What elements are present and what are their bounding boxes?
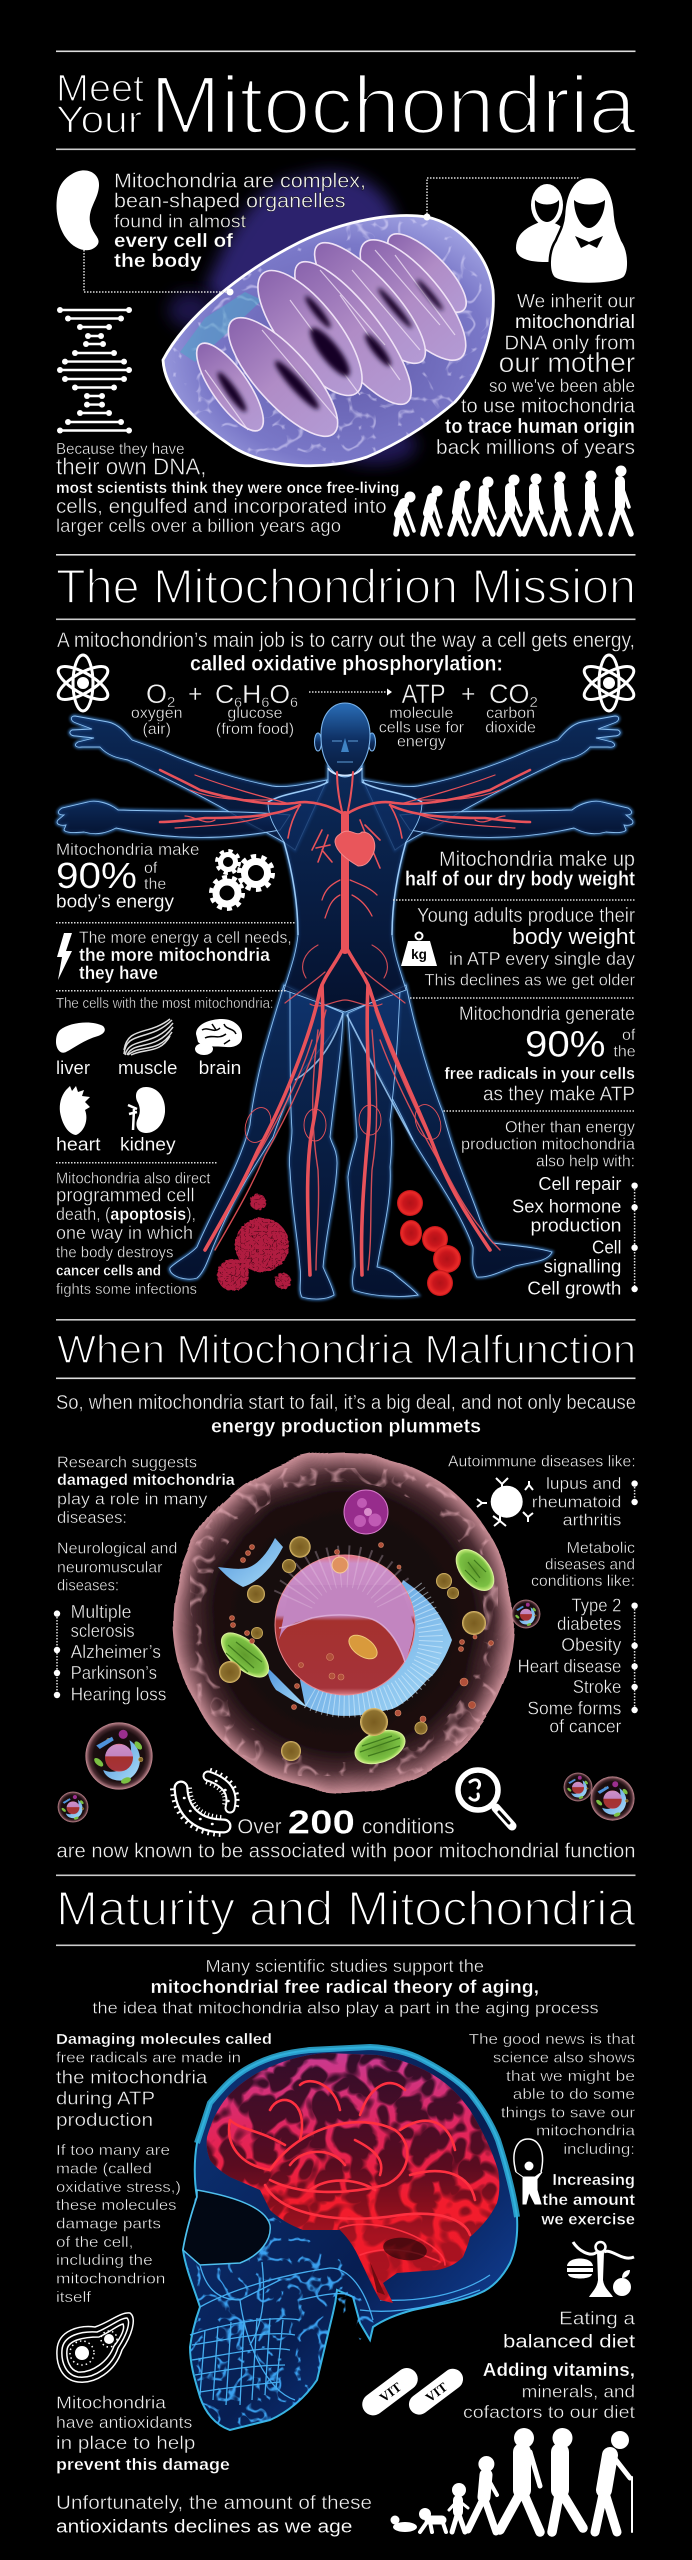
- intro text: Many scientific studies support the: [206, 1956, 484, 1976]
- text: apoptosis: the body destroys: [56, 1245, 174, 1262]
- formula labels: [131, 705, 536, 751]
- text: more energy more mitochondria: they have: [79, 963, 158, 983]
- formula labels: energy: [397, 734, 446, 751]
- text: apoptosis: one way in which: [56, 1223, 193, 1243]
- list: other functions: Cell: [592, 1237, 621, 1257]
- icon: bacteria: [181, 1776, 231, 1826]
- formula labels: dioxide: [485, 720, 536, 737]
- stat: 90 percent of energy: the: [144, 876, 166, 893]
- text: their own DNA: cells, engulfed and incorporated into: [56, 496, 387, 518]
- formula: CO: [489, 679, 530, 709]
- icon: liver: [56, 1023, 105, 1053]
- list: metabolic diseases: Some forms: [527, 1699, 621, 1719]
- list: metabolic diseases: [518, 1595, 638, 1736]
- list: other functions: production: [530, 1216, 622, 1236]
- text: apoptosis: cancer cells and: [56, 1263, 161, 1280]
- stat: 90 percent of energy: Mitochondria make: [56, 841, 200, 859]
- text: inherit from mother: to use mitochondria: [461, 396, 636, 418]
- formula: ATP: [402, 679, 446, 709]
- text: neurological diseases: Neurological and: [57, 1541, 177, 1558]
- text: other functions: [461, 1118, 636, 1171]
- list: metabolic diseases: Stroke: [573, 1677, 621, 1697]
- heart: [335, 831, 375, 866]
- formula labels: (air): [142, 721, 171, 738]
- text: bean-shaped organelles: every cell of: [114, 230, 234, 252]
- text: oxidative stress: damage parts: [56, 2216, 161, 2233]
- connector: bean to mitochondrion: [84, 250, 234, 296]
- text: neurological diseases: diseases:: [57, 1578, 119, 1595]
- text: bean-shaped organelles: the body: [114, 250, 202, 272]
- formula: 6: [234, 694, 242, 710]
- icon: jump rope: [514, 2139, 543, 2204]
- text: inherit from mother: our mother: [499, 347, 635, 378]
- text: autoimmune diseases: arthritis: [563, 1510, 621, 1529]
- text: free radicals: during ATP: [56, 2089, 155, 2109]
- text: inherit from mother: DNA only from: [504, 332, 635, 354]
- formula labels: carbon: [486, 705, 535, 722]
- organ labels row 1: liver: [56, 1058, 90, 1078]
- icon: mitochondrion outline: [57, 2313, 133, 2382]
- icon: vitamin pills: VIT: [377, 2379, 404, 2405]
- text: good news: able to do some: [513, 2086, 635, 2103]
- text: good news: The good news is that: [469, 2031, 636, 2048]
- text: damaged mitochondria: [57, 1454, 235, 1527]
- orange mitochondrion: [345, 1630, 381, 1664]
- text: body weight in ATP: [417, 905, 636, 990]
- text: balanced diet: Eating a: [559, 2308, 636, 2329]
- stat: 90 percent free radicals: the: [613, 1044, 636, 1061]
- organ labels row 2: kidney: [120, 1135, 176, 1155]
- formula: [146, 679, 538, 711]
- text: autoimmune diseases: Autoimmune diseases like:: [448, 1453, 636, 1470]
- text: over 200 conditions: Over: [237, 1816, 282, 1839]
- text: more energy more mitochondria: The more energy a cell needs,: [79, 928, 292, 947]
- text: free radicals: [56, 2031, 272, 2130]
- icon: magnifying glass: [458, 1770, 512, 1826]
- text: their own DNA: Because they have: [56, 441, 184, 458]
- cell illustration: [174, 1452, 514, 1792]
- text: free radicals: production: [56, 2110, 153, 2130]
- text: vitamins: [463, 2360, 635, 2422]
- icon: heart organ: [60, 1086, 90, 1135]
- small vesicle dots: [230, 1542, 494, 1722]
- intro text: the idea that mitochondria also play a part in the aging process: [92, 1998, 599, 2018]
- heading: Maturity and Mitochondria: [56, 1883, 636, 1936]
- icon: brain: [195, 1019, 242, 1055]
- text: apoptosis: fights some infections: [56, 1281, 197, 1298]
- text: oxidative stress: [56, 2142, 181, 2306]
- stat: 90 percent free radicals: Mitochondria generate: [459, 1004, 635, 1025]
- panel: the mitochondrion mission: [54, 554, 638, 1299]
- text: free radicals: free radicals are made in: [56, 2049, 241, 2066]
- text: antioxidants: in place to help: [56, 2433, 195, 2453]
- text: bean-shaped organelles: found in almost: [114, 210, 246, 231]
- text: good news: that we might be: [506, 2068, 635, 2085]
- stat: 90 percent free radicals: [444, 1004, 636, 1106]
- text: antioxidants: Mitochondria: [56, 2393, 166, 2413]
- icon: bean: [57, 170, 99, 250]
- endoplasmic reticulum: [218, 1538, 452, 1716]
- text: neurological diseases: [57, 1541, 177, 1595]
- text: oxidative stress: these molecules: [56, 2197, 176, 2214]
- text: autoimmune diseases: lupus and: [546, 1474, 621, 1493]
- list: neurological diseases: Hearing loss: [71, 1685, 166, 1705]
- formula: +: [188, 680, 203, 708]
- title: Your: [56, 100, 142, 142]
- list: metabolic diseases: Heart disease: [518, 1656, 621, 1676]
- text: free radicals: the mitochondria: [56, 2068, 208, 2088]
- icon: atom right: [580, 655, 638, 711]
- text: neurological diseases: neuromuscular: [57, 1560, 162, 1576]
- text: autoimmune diseases: [448, 1453, 638, 1529]
- text: good news: science also shows: [493, 2049, 635, 2066]
- text: inherit from mother: [436, 292, 636, 459]
- icon: antibodies: [477, 1478, 533, 1526]
- list: neurological diseases: Multiple: [71, 1602, 132, 1622]
- icon: balance scale: [567, 2242, 634, 2297]
- stat: 90 percent free radicals: of: [622, 1027, 636, 1044]
- stat: 90 percent of energy: of: [144, 860, 158, 877]
- organ labels row 2: [56, 1135, 176, 1155]
- intro text: [56, 1392, 636, 1438]
- section rule bottom: [56, 618, 636, 620]
- text: inherit from mother: mitochondrial: [515, 312, 635, 333]
- icon: gears: [212, 851, 272, 908]
- formula: O: [146, 679, 167, 709]
- text: their own DNA: their own DNA,: [56, 454, 206, 480]
- formula labels: oxygen: [131, 705, 182, 722]
- text: inherit from mother: back millions of years: [436, 437, 635, 459]
- intro text: [92, 1956, 599, 2018]
- section rule bottom: [56, 1378, 636, 1379]
- icon: evolution silhouettes: [396, 466, 631, 534]
- text: exercise: we exercise: [540, 2211, 635, 2228]
- text: antioxidants: prevent this damage: [56, 2456, 230, 2474]
- text: damaged mitochondria: Research suggests: [57, 1454, 197, 1472]
- text: inherit from mother: We inherit our: [517, 292, 636, 312]
- section rule bottom: [56, 1944, 636, 1946]
- icon: vitamin pills: VIT: [423, 2379, 450, 2405]
- nucleus: [275, 1555, 415, 1695]
- text: other functions: production mitochondria: [461, 1134, 636, 1153]
- text: over 200 conditions: conditions: [362, 1816, 454, 1839]
- list: other functions: Cell repair: [538, 1174, 621, 1194]
- stat: 90 percent of energy: body’s energy: [56, 892, 174, 912]
- formula labels: (from food): [216, 721, 294, 738]
- text: apoptosis: death, (apoptosis),: [56, 1204, 196, 1224]
- list: metabolic diseases: Obesity: [561, 1635, 621, 1655]
- illustration: red blood cells: [397, 1190, 461, 1296]
- text: oxidative stress: of the cell,: [56, 2234, 133, 2251]
- illustration: cancer cells: [217, 1194, 291, 1291]
- text: autoimmune diseases: rheumatoid: [532, 1492, 621, 1512]
- text: bean-shaped organelles: [114, 170, 366, 272]
- text: other functions: Other than energy: [505, 1118, 635, 1137]
- text: apoptosis: programmed cell: [56, 1186, 195, 1207]
- mitochondrion illustration: [163, 172, 493, 466]
- stat: 90 percent free radicals: as they make ATP: [483, 1084, 635, 1106]
- list: other functions: Sex hormone: [512, 1196, 621, 1216]
- icon: stages of aging silhouettes: [390, 2428, 632, 2532]
- list: neurological diseases: [54, 1602, 166, 1705]
- icon: kg weight: kg: [411, 947, 427, 962]
- text: more energy more mitochondria: [79, 928, 292, 983]
- list: neurological diseases: Parkinson’s: [71, 1663, 157, 1683]
- title rule top: [56, 50, 636, 52]
- intro text: [57, 628, 635, 676]
- text: damaged mitochondria: play a role in many: [57, 1490, 208, 1509]
- text: their own DNA: larger cells over a billion years ago: [56, 516, 341, 536]
- text: over 200 conditions: [56, 1804, 636, 1862]
- small cells: [58, 1600, 635, 1822]
- list: neurological diseases: Alzheimer’s: [71, 1642, 161, 1662]
- list: other functions: [512, 1174, 638, 1298]
- text: balanced diet: balanced diet: [503, 2331, 635, 2352]
- icon: atom left: [54, 655, 112, 711]
- text: antioxidants decline: antioxidants declines as we age: [56, 2515, 352, 2536]
- connector: mitochondrion to parents: [424, 178, 582, 220]
- text: oxidative stress: oxidative stress,): [56, 2179, 181, 2196]
- text: body weight in ATP: Young adults produce their: [417, 905, 635, 927]
- stat: 90 percent free radicals: free radicals in your cells: [444, 1064, 635, 1083]
- text: antioxidants decline: Unfortunately, the amount of these: [56, 2493, 372, 2514]
- list: metabolic diseases: of cancer: [549, 1716, 621, 1736]
- stat: 90 percent of energy: 90%: [56, 855, 137, 896]
- text: antioxidants decline: [56, 2493, 372, 2536]
- intro text: So, when mitochondria start to fail, it’s a big deal, and not only because: [56, 1392, 636, 1414]
- list: metabolic diseases: diabetes: [557, 1614, 621, 1634]
- list: metabolic diseases: Type 2: [572, 1595, 621, 1615]
- text: metabolic diseases: diseases and: [545, 1556, 635, 1573]
- icon: parents: [516, 177, 628, 284]
- text: exercise: Increasing: [552, 2172, 635, 2189]
- list: other functions: Cell growth: [527, 1278, 621, 1298]
- icon: muscle: [124, 1019, 173, 1055]
- intro text: energy production plummets: [211, 1416, 481, 1438]
- title: Mitochondria: [150, 60, 636, 151]
- text: vitamins: minerals, and: [522, 2381, 635, 2401]
- heading: The Mitochondrion Mission: [56, 561, 636, 614]
- stat: 90 percent free radicals: 90%: [525, 1024, 606, 1065]
- heading: When Mitochondria Malfunction: [57, 1328, 636, 1372]
- text: vitamins: cofactors to our diet: [463, 2402, 635, 2422]
- green mitochondria: [214, 1543, 501, 1770]
- arrow: [309, 688, 392, 696]
- text: damaged mitochondria: damaged mitochondria: [57, 1472, 235, 1489]
- intro text: mitochondrial free radical theory of aging,: [150, 1976, 539, 1997]
- text: metabolic diseases: Metabolic: [567, 1540, 635, 1557]
- text: oxidative stress: If too many are: [56, 2142, 170, 2159]
- organ labels row 1: muscle: [118, 1058, 177, 1078]
- text: balanced diet: [503, 2308, 636, 2352]
- formula: 2: [530, 694, 538, 711]
- text: exercise: [540, 2172, 635, 2228]
- text: free radicals: Damaging molecules called: [56, 2031, 272, 2048]
- golden vesicles: [219, 1536, 486, 1761]
- organ labels row 2: heart: [56, 1135, 101, 1155]
- panel: when mitochondria malfunction: [54, 1319, 638, 1862]
- title: Meet: [56, 68, 144, 110]
- text: metabolic diseases: [531, 1540, 635, 1590]
- list: neurological diseases: sclerosis: [71, 1621, 135, 1641]
- text: antioxidants: have antioxidants: [56, 2414, 192, 2432]
- text: over 200 conditions: 200: [288, 1804, 355, 1841]
- text: body weight in ATP: body weight: [512, 924, 635, 949]
- formula labels: glucose: [227, 705, 283, 722]
- section rule top: [56, 1319, 636, 1321]
- panel: meet your mitochondria: [56, 50, 636, 536]
- text: oxidative stress: mitochondrion: [56, 2271, 166, 2288]
- text: oxidative stress: including the: [56, 2252, 153, 2269]
- text: body weight in ATP: in ATP every single day: [449, 948, 636, 969]
- formula: 6: [261, 694, 270, 710]
- section rule top: [56, 554, 636, 556]
- text: over 200 conditions: are now known to be associated with poor mitochondrial function: [56, 1840, 636, 1862]
- section rule top: [56, 1874, 636, 1876]
- text: damaged mitochondria: diseases:: [57, 1508, 127, 1527]
- list: other functions: signalling: [544, 1256, 621, 1276]
- icon: kg weight: [401, 932, 437, 966]
- text: more energy more mitochondria: the more mitochondria: [79, 945, 271, 965]
- text: inherit from mother: to trace human origin: [445, 416, 635, 438]
- text: good news: [469, 2031, 636, 2158]
- formula: +: [461, 680, 476, 708]
- formula: H: [242, 679, 261, 709]
- formula: 6: [290, 694, 298, 710]
- formula labels: cells use for: [379, 720, 465, 737]
- formula labels: molecule: [389, 705, 454, 722]
- icon: kidney: [128, 1087, 165, 1133]
- icon: lightning: [57, 933, 72, 980]
- icon: vitamin pills: [358, 2364, 468, 2420]
- text: inherit from mother: so we've been able: [489, 376, 635, 396]
- text: good news: mitochondria: [536, 2122, 636, 2139]
- text: good news: including:: [563, 2141, 635, 2158]
- text: good news: things to save our: [501, 2104, 635, 2121]
- icon: DNA: [57, 307, 132, 434]
- organ labels row 1: brain: [199, 1058, 241, 1078]
- organ labels row 1: [56, 1058, 241, 1078]
- text: body weight in ATP: This declines as we get older: [424, 971, 635, 990]
- text: bean-shaped organelles: Mitochondria are complex,: [114, 170, 366, 193]
- panel: maturity and mitochondria: [56, 1874, 636, 2536]
- text: bean-shaped organelles: bean-shaped organelles: [114, 190, 346, 213]
- intro text: called oxidative phosphorylation:: [190, 653, 503, 676]
- text: metabolic diseases: conditions like:: [531, 1573, 635, 1590]
- title rule bottom: [56, 148, 636, 150]
- formula: C: [215, 679, 234, 709]
- text: cells with most mitochondria: The cells with the most mitochondria:: [56, 996, 274, 1012]
- text: oxidative stress: made (called: [56, 2161, 152, 2178]
- text: half of dry body weight: Mitochondria make up: [439, 848, 635, 871]
- text: apoptosis: [56, 1170, 211, 1298]
- text: apoptosis: Mitochondria also direct: [56, 1170, 211, 1187]
- text: exercise: the amount: [542, 2192, 635, 2209]
- intro text: A mitochondrion’s main job is to carry out the way a cell gets energy,: [57, 628, 635, 652]
- formula: O: [269, 679, 290, 709]
- formula: 2: [167, 694, 175, 711]
- text: antioxidants: [56, 2393, 230, 2474]
- human body illustration: [57, 703, 633, 1299]
- purple vacuole: [344, 1490, 388, 1534]
- text: their own DNA: [56, 441, 399, 536]
- stat: 90 percent of energy: [56, 841, 200, 912]
- skull and brain illustration: [183, 2047, 517, 2430]
- text: their own DNA: most scientists think they were once free-living: [56, 480, 399, 497]
- text: half of dry body weight: [405, 848, 635, 891]
- text: oxidative stress: itself: [56, 2289, 92, 2306]
- text: vitamins: Adding vitamins,: [483, 2360, 635, 2380]
- text: half of dry body weight: half of our dry body weight: [405, 869, 635, 891]
- text: other functions: also help with:: [536, 1153, 635, 1171]
